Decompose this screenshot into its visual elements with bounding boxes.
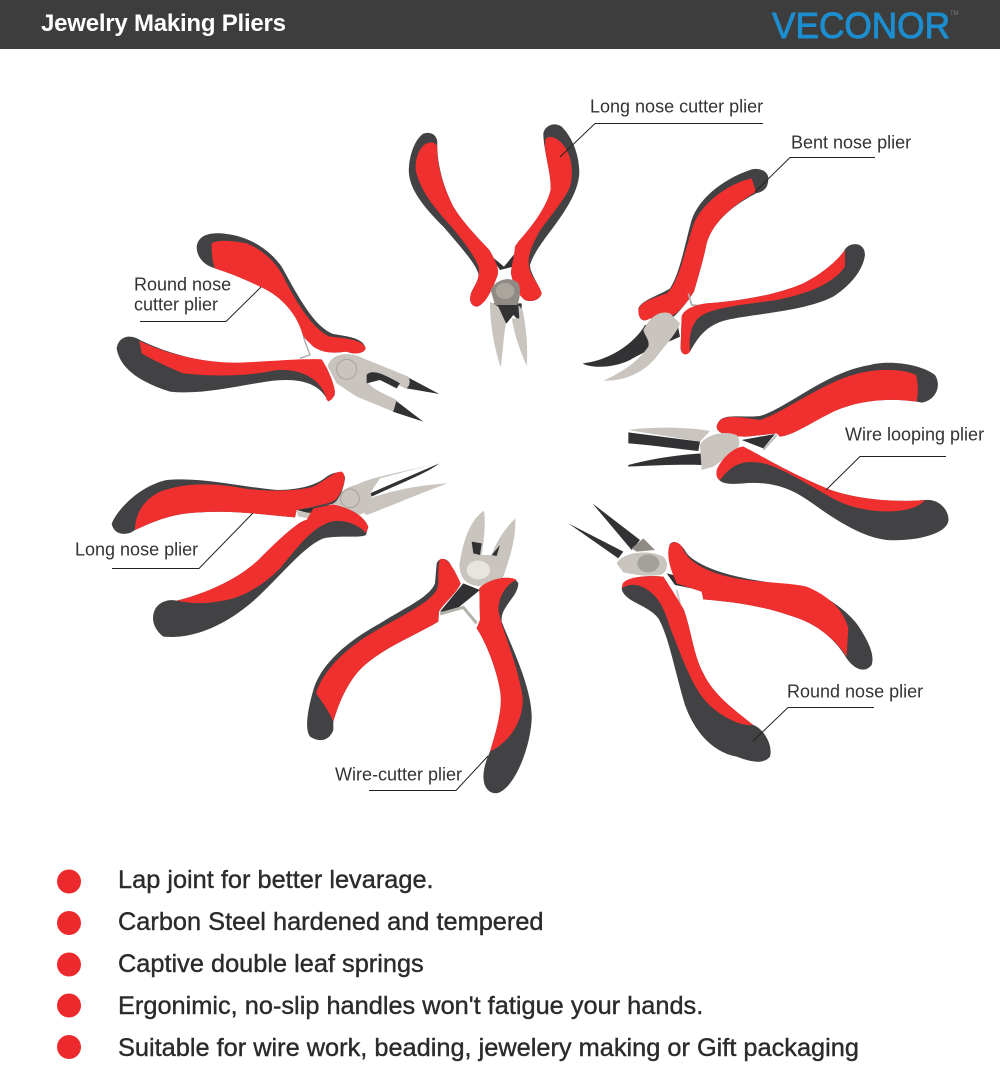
plier: wire looping [628,363,948,540]
plier: long nose [112,463,447,637]
logo: VECONOR [772,5,950,46]
header bar [0,0,1000,49]
logo: TM [950,11,959,17]
label: round nose cutter plier: cutter plier [134,294,218,314]
label: long nose plier: Long nose plier [75,540,198,560]
feature list [57,866,859,1062]
plier: wire-cutter [307,511,532,793]
label: wire looping plier [826,424,984,490]
label: wire looping plier: Wire looping plier [845,424,984,444]
bullet 1: Lap joint for better levarage. [118,866,434,894]
label: long nose cutter plier [560,96,763,157]
bullet 5: Suitable for wire work, beading, jewelery making or Gift packaging [118,1034,859,1062]
plier: long nose cutter [409,124,579,367]
label: wire-cutter plier [335,756,488,790]
plier: round nose [568,503,873,762]
bullet 3: Captive double leaf springs [118,950,424,978]
label: long nose plier [75,513,253,568]
label: wire-cutter plier: Wire-cutter plier [335,764,462,784]
label: long nose cutter plier: Long nose cutter plier [590,96,763,116]
plier: round nose cutter [117,233,439,422]
label: round nose cutter plier [134,274,261,322]
bullet 2: Carbon Steel hardened and tempered [118,908,544,936]
plier: bent nose [583,169,865,381]
label: bent nose plier [755,132,911,192]
title: Jewelry Making Pliers [41,10,286,37]
label: round nose cutter plier: Round nose [134,274,231,294]
label: round nose plier [753,682,923,741]
label: round nose plier: Round nose plier [787,682,923,702]
label: bent nose plier: Bent nose plier [791,132,911,152]
bullet 4: Ergonimic, no-slip handles won't fatigue your hands. [118,992,703,1020]
